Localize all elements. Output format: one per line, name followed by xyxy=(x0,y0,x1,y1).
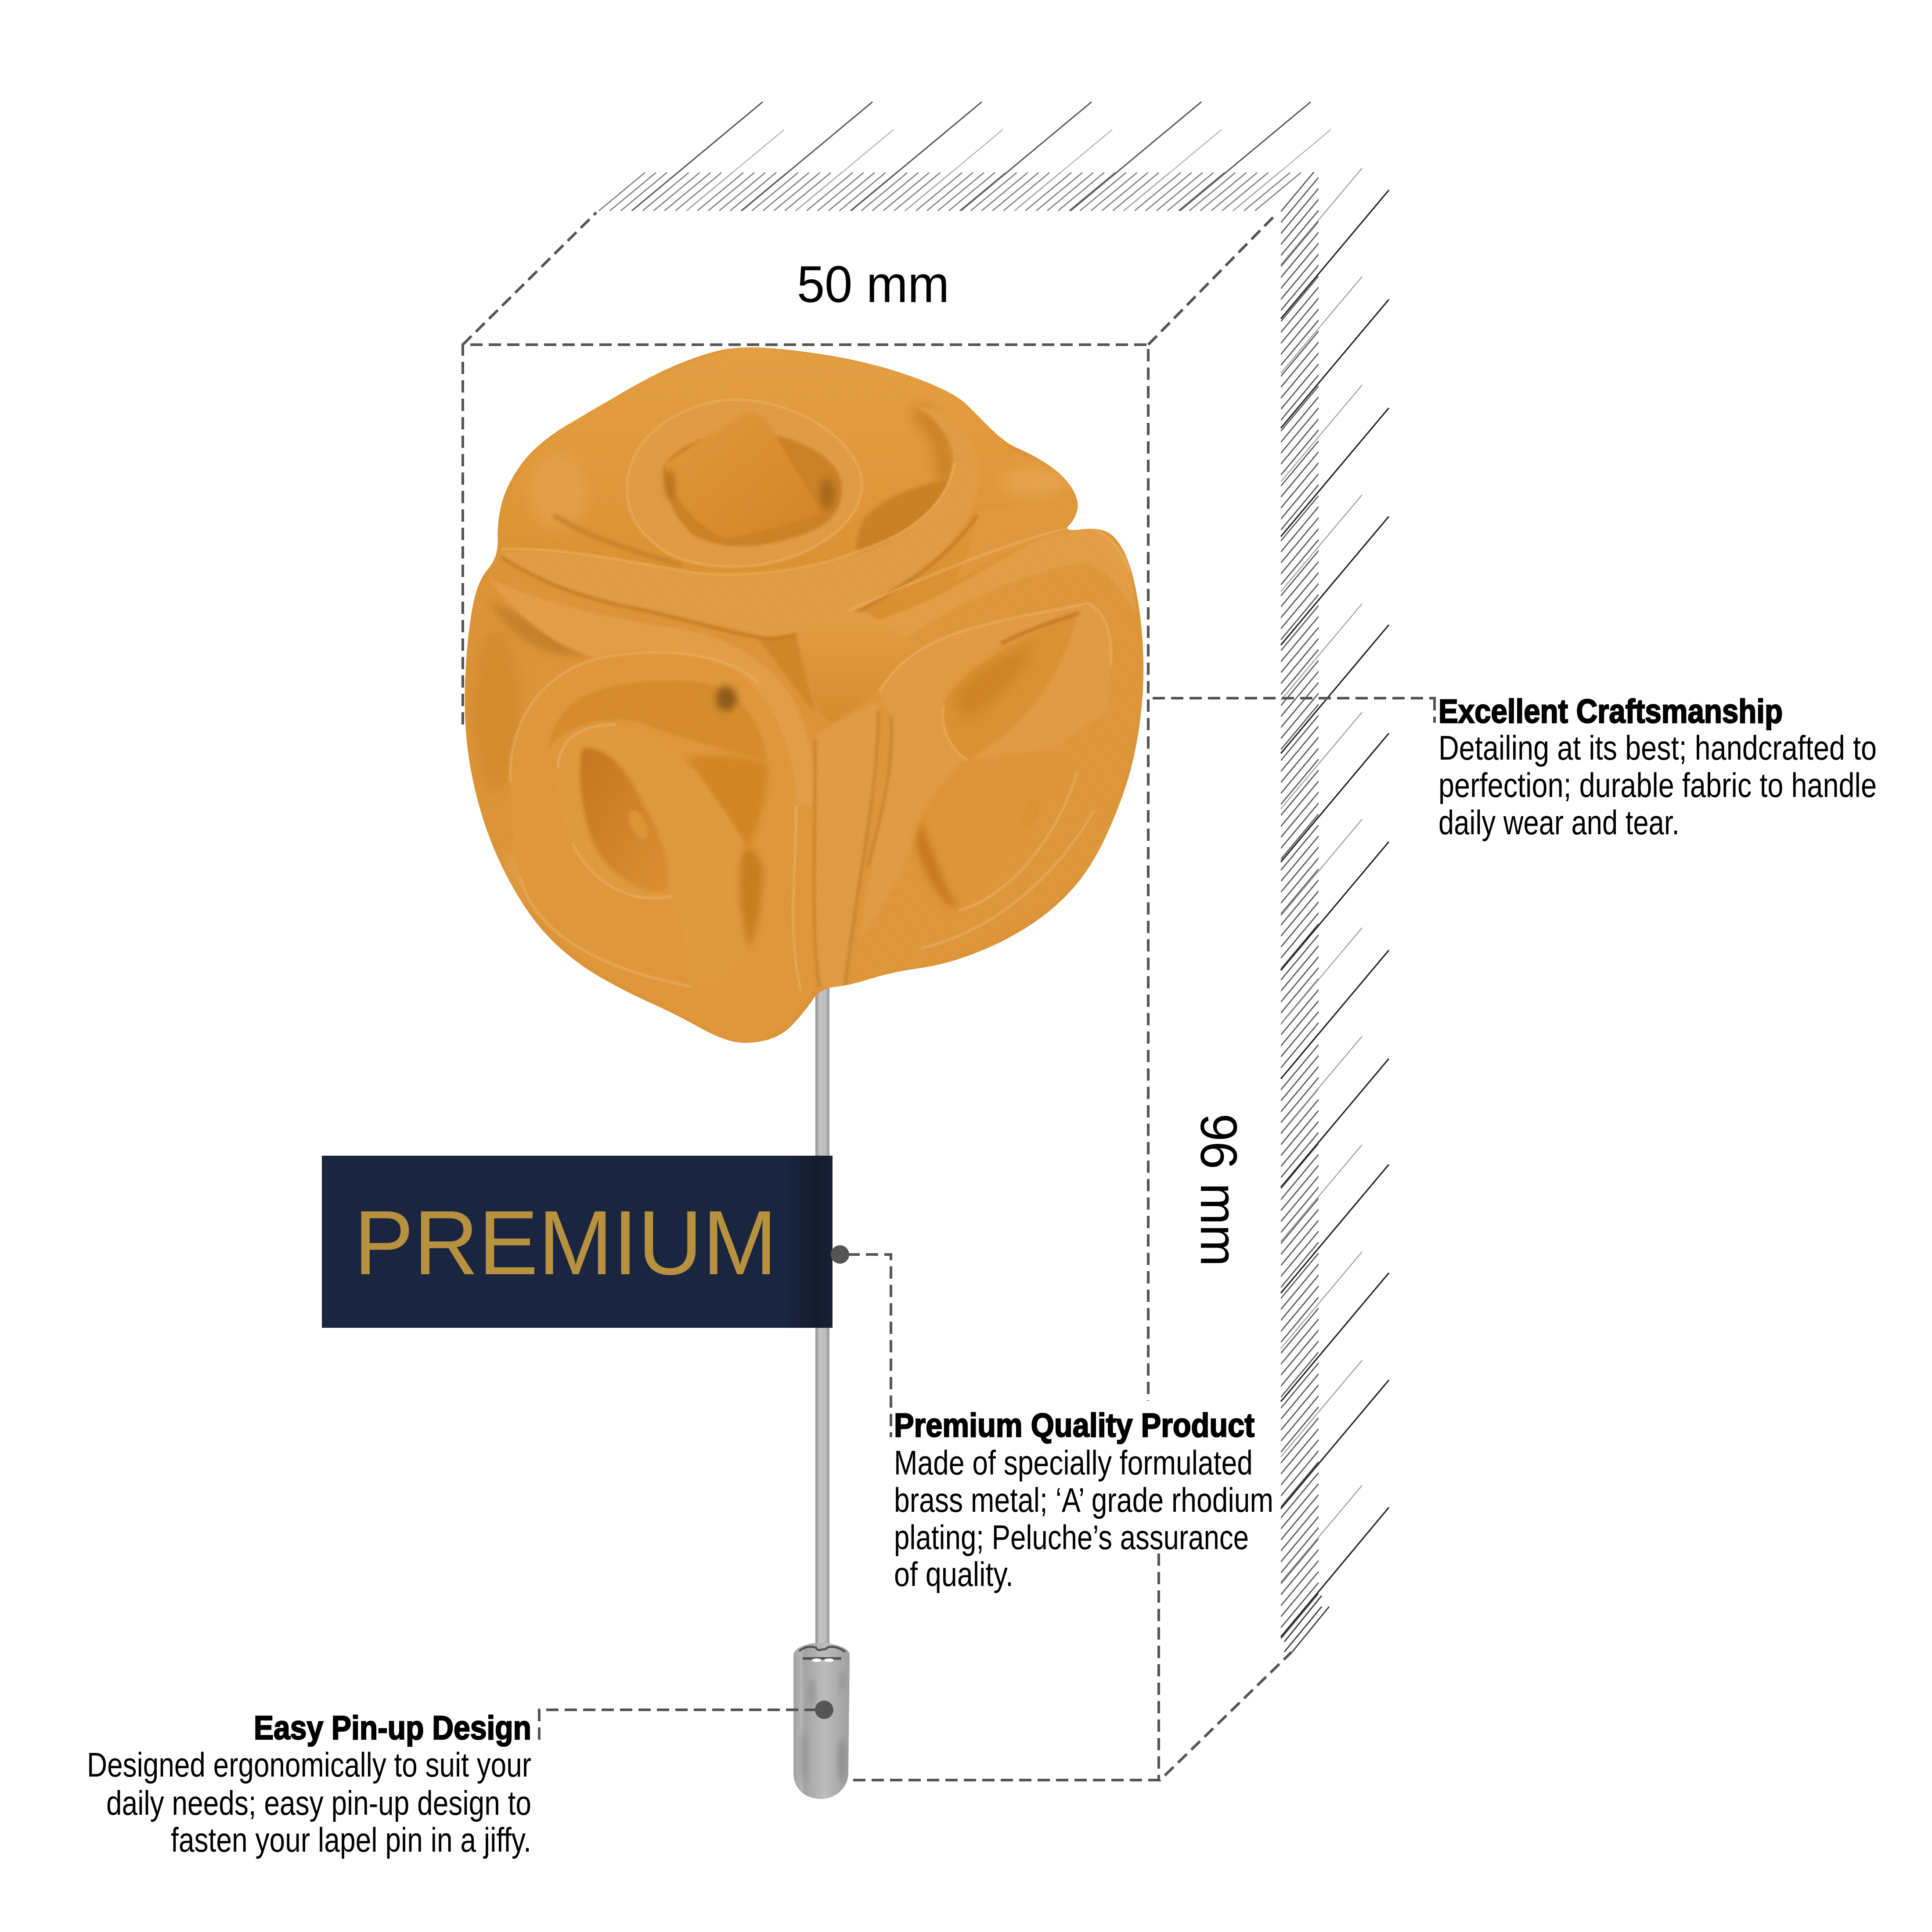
centre triangle fold xyxy=(796,612,916,722)
lower left rose: dark hole xyxy=(716,686,737,711)
soft tonal zones xyxy=(473,633,519,879)
lower left rose: spiral petal xyxy=(558,724,749,987)
hatched right wall edge xyxy=(1281,166,1389,1652)
lower left rose: small bud xyxy=(625,807,652,842)
heading: Excellent Craftsmanship xyxy=(1438,693,1783,730)
body text: daily needs; easy pin-up design to xyxy=(106,1784,531,1822)
leader line with dot xyxy=(539,1701,833,1743)
top rose: dark hollow at right xyxy=(856,477,956,560)
right rose: dark crease xyxy=(916,820,958,908)
centre pleat creases xyxy=(814,710,891,987)
dimension label: height: 96 mm xyxy=(1189,1114,1247,1266)
top rose: soft tones xyxy=(530,410,1068,530)
callout: premium quality product xyxy=(831,1245,1273,1593)
body text xyxy=(894,1443,1273,1593)
body text: plating; Peluche’s assurance xyxy=(894,1518,1249,1557)
callout: easy pin-up design xyxy=(87,1701,833,1859)
body text xyxy=(87,1745,531,1859)
heading: Easy Pin-up Design xyxy=(254,1709,531,1747)
top rose: rolled rim band xyxy=(501,406,980,637)
flower: orange satin rose xyxy=(465,347,1143,1043)
right rose: body xyxy=(839,527,1144,989)
top rose: inner ring xyxy=(627,400,862,566)
hatched top wall edge xyxy=(599,102,1331,211)
label text: PREMIUM xyxy=(354,1192,777,1294)
left recess shade xyxy=(493,604,582,656)
centre hollow xyxy=(758,631,815,713)
heading: Premium Quality Product xyxy=(894,1407,1254,1444)
premium label tag xyxy=(322,1156,833,1328)
right rose: rolled band xyxy=(858,530,1137,653)
body text: Made of specially formulated xyxy=(894,1443,1253,1482)
dimension label: width: 50 mm xyxy=(797,256,949,314)
body text: fasten your lapel pin in a jiffy. xyxy=(171,1820,531,1859)
satin twill texture xyxy=(439,329,1201,1091)
lower left rose: ring body xyxy=(513,739,686,981)
lower left rose: right hollow xyxy=(687,756,768,848)
top rose: ring centre xyxy=(663,432,842,546)
leader line with dot xyxy=(831,1245,891,1437)
callout: excellent craftsmanship xyxy=(1153,693,1877,842)
top rose: bud xyxy=(665,412,822,539)
body text: brass metal; ‘A’ grade rhodium xyxy=(894,1481,1273,1519)
right rose: inner crease xyxy=(1001,613,1080,644)
dashed dimension box xyxy=(463,213,1292,1780)
pin shaft xyxy=(815,966,829,1651)
lower left rose: top band xyxy=(487,577,815,806)
satin rim highlights xyxy=(501,400,1130,991)
body text: daily wear and tear. xyxy=(1438,803,1680,842)
centre pleat xyxy=(813,701,879,989)
top rose: petal base xyxy=(498,346,1080,637)
body text: Designed ergonomically to suit your xyxy=(87,1745,531,1784)
top rose: rim under shadow xyxy=(501,515,977,639)
pin clutch cap xyxy=(793,1643,850,1799)
body text: of quality. xyxy=(894,1555,1013,1593)
body text xyxy=(1438,728,1877,842)
right rose: inner fold xyxy=(858,603,1111,944)
lower left rose: upper hollow xyxy=(548,681,766,761)
lower fold shade xyxy=(740,848,763,948)
lower left rose: spiral hollow xyxy=(580,748,669,892)
right rose: interior xyxy=(943,615,1077,761)
top rose: bud shadows xyxy=(665,469,835,509)
right rose: lower fold xyxy=(920,748,1077,910)
right rose: interior shading xyxy=(953,644,1034,720)
right rose: small bud xyxy=(1018,797,1044,829)
top rose: right tip xyxy=(953,496,1078,582)
top rose: crease left of ring xyxy=(553,515,682,565)
leader line xyxy=(1153,698,1436,723)
